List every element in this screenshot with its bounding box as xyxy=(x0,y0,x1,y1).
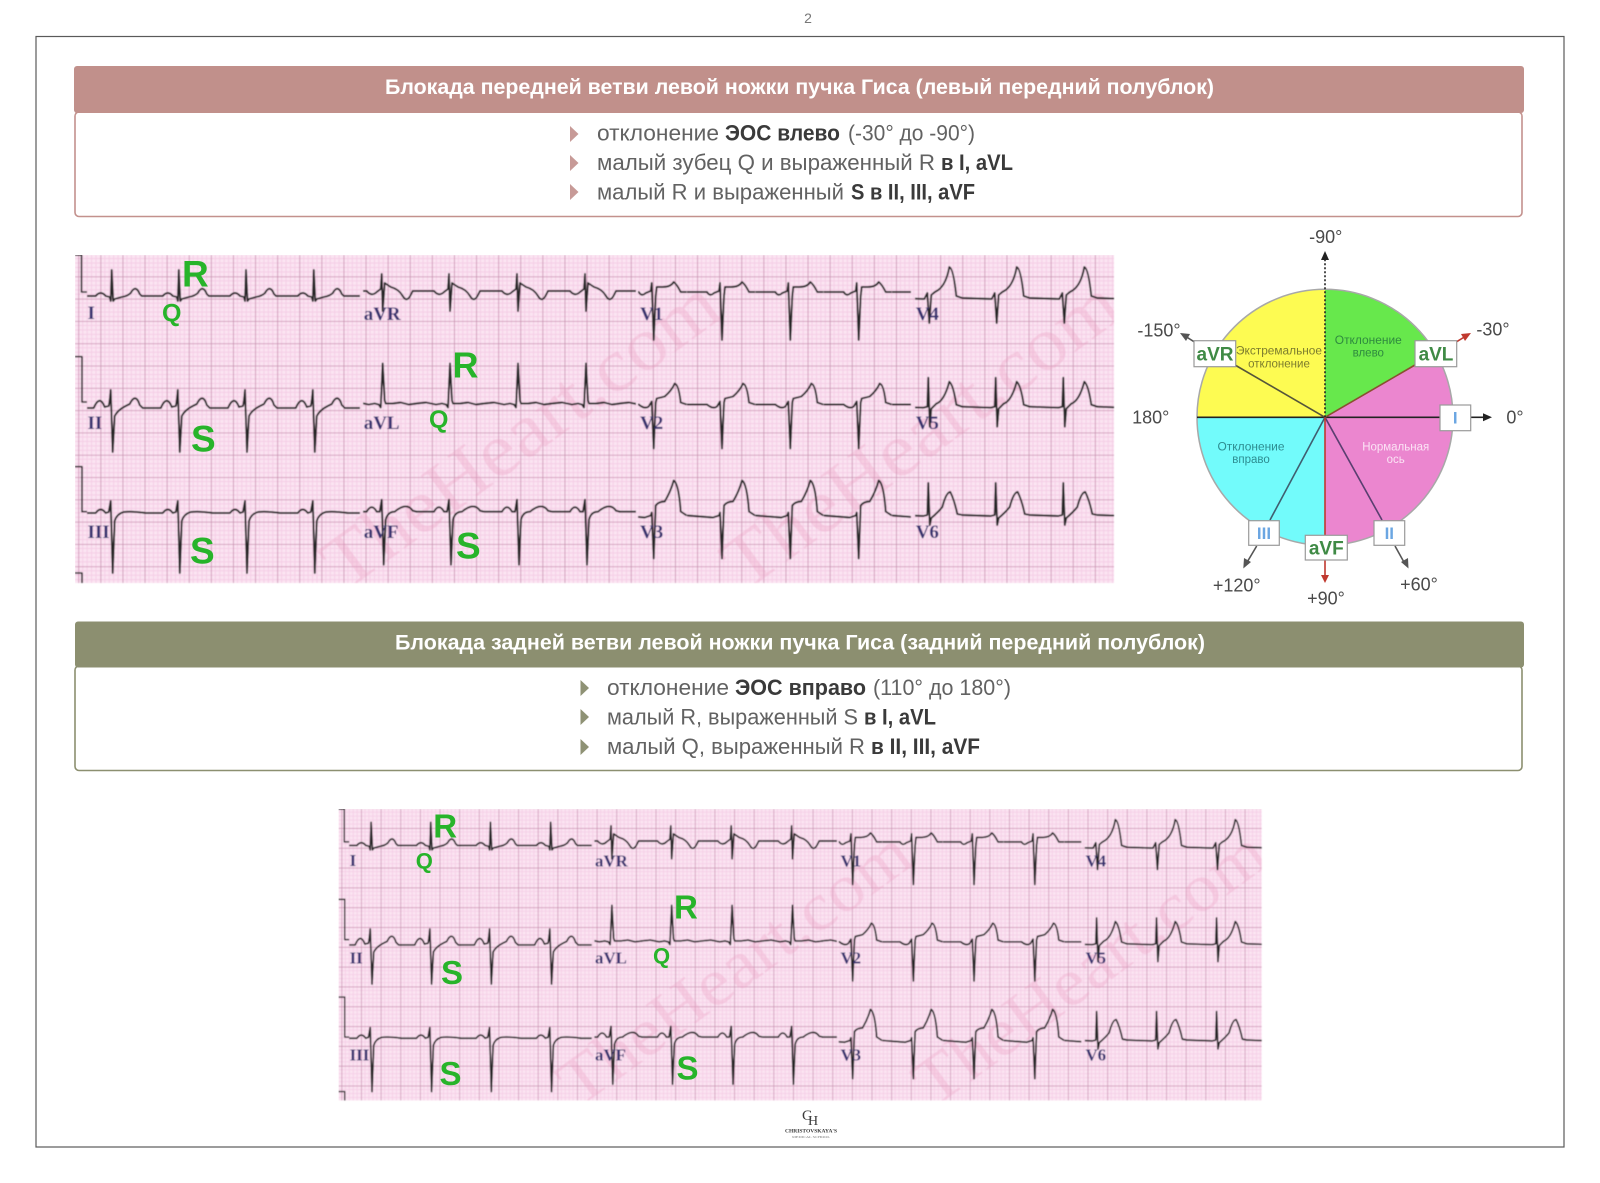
bullet: axis deviation right xyxy=(580,675,1011,700)
degree labels: +90° xyxy=(1307,588,1345,608)
ECG strip: aVR xyxy=(364,304,401,325)
degree labels: -150° xyxy=(1137,320,1181,340)
logo: school mark: C xyxy=(802,1108,812,1124)
bullet: axis deviation right: отклонение xyxy=(607,675,729,700)
sector labels: вправо xyxy=(1232,454,1270,466)
sector: normal axis xyxy=(1325,353,1453,545)
logo: school mark: H xyxy=(808,1114,818,1129)
wave annotations: R xyxy=(674,888,698,925)
sector labels: ось xyxy=(1387,454,1405,466)
chart: ECG anterior block xyxy=(75,255,1115,584)
header bar xyxy=(74,66,1524,113)
sector labels: Нормальная xyxy=(1362,442,1429,454)
lead boxes: aVF xyxy=(1309,538,1344,560)
wave annotations: R xyxy=(433,807,457,844)
ECG strip: I xyxy=(88,303,95,324)
lead boxes: III xyxy=(1257,524,1271,543)
criteria box xyxy=(75,666,1522,770)
bullet: small Q and tall R xyxy=(580,734,980,759)
arrows xyxy=(1180,251,1492,583)
sector labels: Экстремальное xyxy=(1236,346,1322,358)
ECG strip xyxy=(338,809,1262,1102)
bullet: small R and deep S: малый R, выраженный S xyxy=(607,704,858,730)
wave annotations: R xyxy=(182,254,209,295)
panel: anterior fascicular block xyxy=(74,66,1524,216)
ECG strip: aVL xyxy=(364,413,400,434)
logo: school mark: CHRISTOVSKAYA'S xyxy=(785,1130,837,1134)
ECG strip: II xyxy=(350,949,363,968)
ECG strip: TheHeart.com xyxy=(706,262,1135,606)
sector labels: Отклонение xyxy=(1335,335,1402,347)
ECG strip: TheHeart.com xyxy=(543,814,925,1121)
ECG strip: V6 xyxy=(916,522,939,543)
bullet: axis deviation left xyxy=(570,120,975,146)
header bar xyxy=(75,622,1524,668)
sector labels: влево xyxy=(1353,348,1384,360)
chart: electrical axis wheel xyxy=(1132,227,1524,608)
lead boxes: I xyxy=(1453,408,1458,428)
ECG strip: V4 xyxy=(916,304,939,325)
ECG strip: TheHeart.com xyxy=(899,814,1280,1121)
bullet: axis deviation right: (110° до 180°) xyxy=(873,675,1011,700)
wave annotations: S xyxy=(440,1055,462,1092)
bullet: small R and deep S: S в II, III, aVF xyxy=(851,180,975,204)
wave annotations: R xyxy=(452,344,478,385)
degree labels: 180° xyxy=(1132,408,1169,428)
lead boxes xyxy=(1194,341,1471,560)
bullet: axis deviation left: ЭОС влево xyxy=(725,120,840,146)
ECG strip: V4 xyxy=(1085,852,1107,871)
degree labels: -90° xyxy=(1309,227,1342,247)
degree labels xyxy=(1132,227,1524,608)
wave annotations: S xyxy=(190,530,215,571)
ECG strip: V5 xyxy=(916,413,939,434)
wave annotations: Q xyxy=(416,848,433,873)
ECG strip: III xyxy=(88,522,110,543)
wave annotations: Q xyxy=(429,406,448,434)
ECG strip: V6 xyxy=(1085,1045,1106,1064)
ECG strip: V5 xyxy=(1085,949,1106,968)
bullet: small Q and tall R: в I, aVL xyxy=(941,150,1013,175)
wave annotations: S xyxy=(456,525,481,566)
bullet: small Q and tall R: в II, III, aVF xyxy=(871,734,980,759)
wave annotations: S xyxy=(191,419,216,460)
degree labels: 0° xyxy=(1506,408,1524,428)
axis lines xyxy=(1197,258,1470,560)
wave annotations xyxy=(162,254,481,571)
ECG strip: V1 xyxy=(640,304,663,325)
degree labels: +60° xyxy=(1400,574,1438,594)
ECG strip: aVR xyxy=(595,852,629,871)
ECG strip: III xyxy=(350,1045,369,1064)
panel: posterior fascicular block xyxy=(75,622,1524,770)
wave annotations: S xyxy=(441,954,463,991)
ECG strip: aVL xyxy=(595,949,627,968)
heading: Блокада передней ветви левой ножки пучка Гиса (левый передний полублок) xyxy=(385,76,1214,99)
ECG strip: TheHeart.com xyxy=(306,262,735,606)
wheel outline xyxy=(1197,289,1453,545)
bullet: small R and deep S: в I, aVL xyxy=(864,704,936,730)
sector labels: Отклонение xyxy=(1218,442,1284,454)
degree labels: -30° xyxy=(1476,320,1510,340)
wave annotations: Q xyxy=(653,943,670,968)
ECG strip: V2 xyxy=(640,413,663,434)
wave annotations: Q xyxy=(162,300,181,328)
wave annotations: S xyxy=(676,1049,699,1086)
ECG strip xyxy=(75,255,1115,584)
criteria box xyxy=(75,112,1522,216)
ECG strip: I xyxy=(350,851,356,870)
ECG strip: V2 xyxy=(841,949,861,968)
ECG strip: V3 xyxy=(841,1045,861,1064)
ECG strip: V3 xyxy=(640,522,663,543)
sector labels: отклонение xyxy=(1248,358,1310,370)
sector labels xyxy=(1218,335,1429,466)
degree labels: +120° xyxy=(1213,576,1261,596)
ECG strip: aVF xyxy=(364,522,399,543)
lead boxes: aVL xyxy=(1419,344,1454,366)
chart: ECG posterior block xyxy=(338,809,1262,1102)
sector: extreme deviation xyxy=(1197,289,1325,417)
logo: school mark xyxy=(785,1108,837,1139)
bullet: small R and deep S xyxy=(570,180,975,204)
sector: right deviation xyxy=(1197,417,1325,545)
page number: 2 xyxy=(804,10,812,26)
ECG strip: aVF xyxy=(595,1045,626,1064)
bullet: small Q and tall R: малый Q, выраженный R xyxy=(607,734,865,759)
ECG strip: II xyxy=(88,413,102,434)
lead boxes: II xyxy=(1385,524,1394,543)
ECG strip: V1 xyxy=(841,852,861,871)
lead boxes: aVR xyxy=(1197,344,1234,366)
wave annotations xyxy=(416,807,699,1092)
bullet: small Q and tall R: малый зубец Q и выраженный R xyxy=(597,150,935,175)
sector: left deviation xyxy=(1325,289,1436,417)
heading: Блокада задней ветви левой ножки пучка Гиса (задний передний полублок) xyxy=(395,632,1205,654)
bullet: axis deviation right: ЭОС вправо xyxy=(735,675,866,700)
bullet: axis deviation left: отклонение xyxy=(597,120,719,146)
bullet: small R and deep S: малый R и выраженный xyxy=(597,180,844,204)
bullet: axis deviation left: (-30° до -90°) xyxy=(848,120,975,146)
logo: school mark: MEDICAL SCHOOL xyxy=(792,1135,830,1139)
